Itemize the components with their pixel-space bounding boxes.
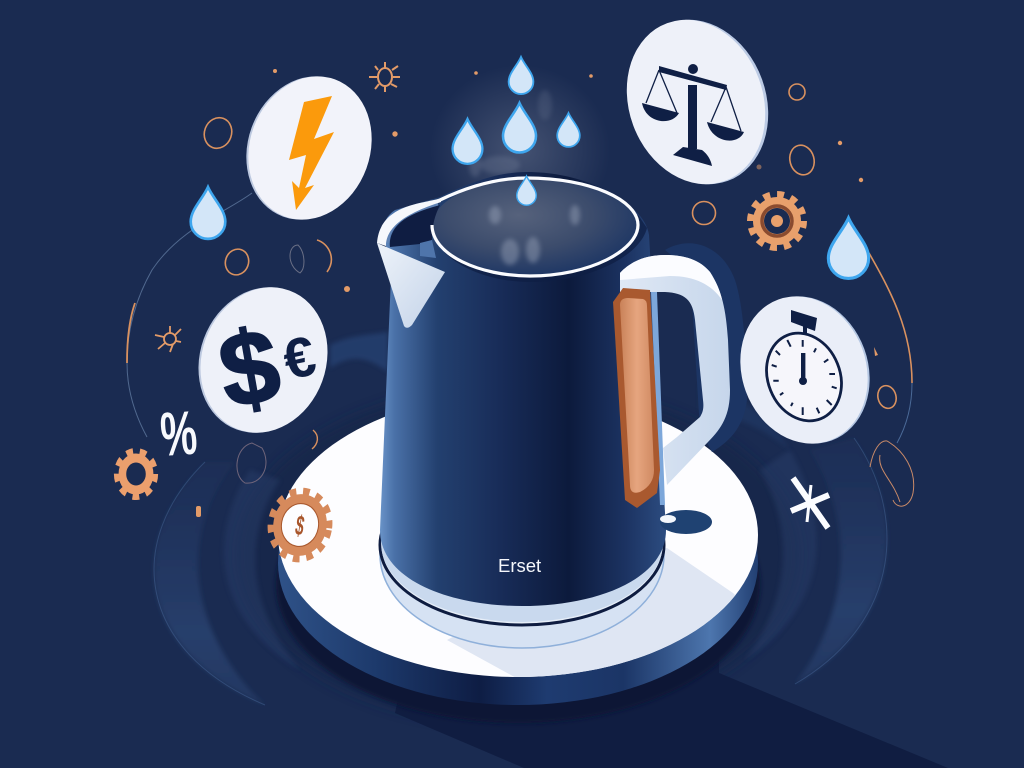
kettle interior xyxy=(432,178,638,276)
decorative dots xyxy=(196,69,878,517)
drop: far right xyxy=(828,218,869,278)
icon: sun top xyxy=(369,62,400,92)
water drops xyxy=(191,57,869,278)
decorative squiggle xyxy=(870,441,914,506)
icon disc: scales xyxy=(604,0,791,204)
platform side xyxy=(278,421,758,705)
decorative rings xyxy=(200,84,899,483)
spout lip xyxy=(377,198,441,246)
steam xyxy=(430,65,610,235)
brand label: Erset xyxy=(498,555,541,576)
gear: left xyxy=(117,452,155,496)
dollar sign: $ xyxy=(211,307,288,431)
euro sign: € xyxy=(278,323,321,392)
drop: left xyxy=(453,119,482,164)
kettle xyxy=(377,172,730,648)
drop: right xyxy=(557,113,580,147)
icon disc: energy xyxy=(227,59,391,237)
drop: falling into kettle xyxy=(517,176,536,205)
platform top xyxy=(278,393,758,677)
icon disc: currency xyxy=(178,269,348,451)
handle top face xyxy=(620,255,722,300)
gear: upper right xyxy=(751,195,803,247)
handle back shadow xyxy=(665,243,747,452)
dark shoulder band xyxy=(433,215,647,282)
icon: lightning bolt xyxy=(289,96,334,210)
icon disc: stopwatch xyxy=(720,278,890,462)
light strip on right edge xyxy=(651,292,665,505)
percent label: % xyxy=(158,398,199,470)
water vapour flecks xyxy=(489,205,580,265)
copper grip xyxy=(613,288,660,508)
orbit arcs xyxy=(127,193,912,443)
platform shaded area xyxy=(448,548,736,677)
gear: copper with dollar xyxy=(266,488,334,562)
glass base bands xyxy=(380,462,664,648)
drop: centre xyxy=(503,103,536,153)
icon: balance scale xyxy=(642,64,744,166)
motion swirls around the base xyxy=(154,332,887,725)
platform base xyxy=(278,393,765,705)
icon: asterisk xyxy=(791,478,829,528)
gear: copper with dollar: $ xyxy=(293,510,307,542)
power knob xyxy=(660,510,712,534)
spout interior xyxy=(390,205,440,247)
kettle body xyxy=(380,172,666,606)
floor shadow xyxy=(276,447,948,768)
spout xyxy=(377,243,445,328)
rim xyxy=(432,178,638,276)
drop: top xyxy=(509,57,533,94)
icon: sun left xyxy=(155,326,181,352)
drop: far left xyxy=(191,187,225,239)
infographic illustration xyxy=(114,20,948,768)
icon: stopwatch xyxy=(754,310,854,432)
handle xyxy=(620,255,730,485)
